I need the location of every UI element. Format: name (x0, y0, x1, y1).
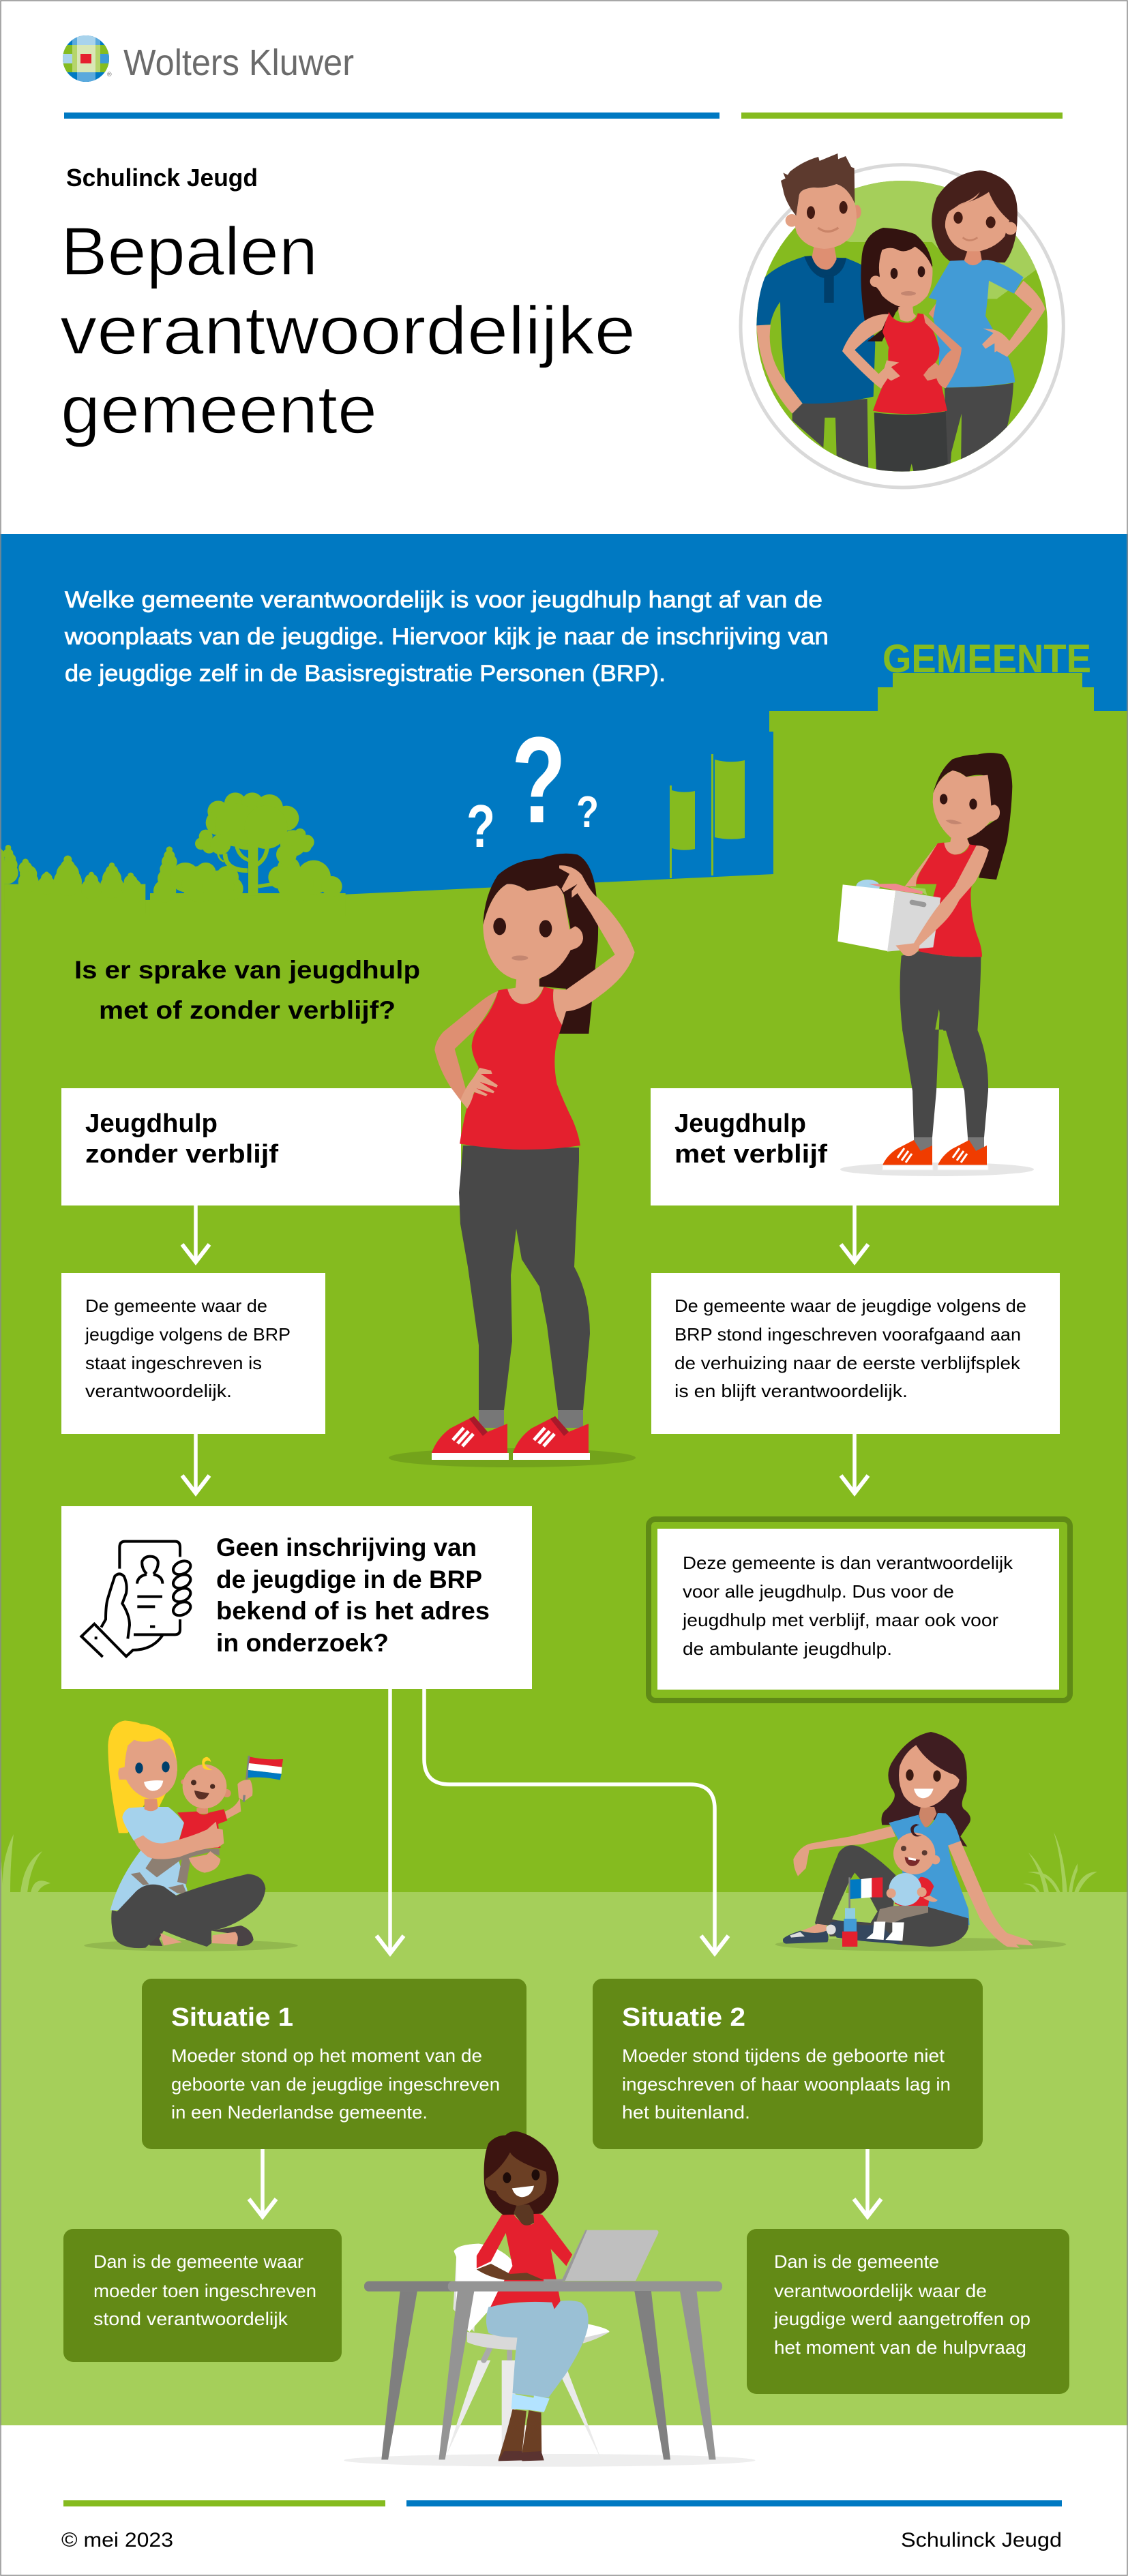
box: situatie 1: geboorte van de jeugdige ingeschreven (171, 2074, 500, 2095)
figure: girl (842, 228, 962, 473)
box: jeugdhulp met verblijf: Jeugdhulp (674, 1109, 806, 1138)
question marks (466, 712, 599, 860)
illustration: family in circle (737, 150, 1069, 488)
title: gemeente (61, 372, 377, 448)
box: deze gemeente: jeugdhulp met verblijf, maar ook voor (682, 1610, 998, 1630)
box: jeugdhulp zonder verblijf: Jeugdhulp (85, 1109, 218, 1138)
box: result situatie 2: Dan is de gemeente (774, 2251, 939, 2272)
illustration: blonde mother with baby and Dutch flag (84, 1720, 298, 1951)
box: gemeente met verblijf: BRP stond ingeschreven voorafgaand aan (674, 1324, 1021, 1345)
question heading: met of zonder verblijf? (99, 996, 396, 1024)
bottom rule blue (406, 2500, 1062, 2506)
box: result situatie 2: verantwoordelijk waar de (774, 2281, 987, 2301)
box: jeugdhulp met verblijf (651, 1088, 1059, 1205)
arrow: text to deze gemeente (841, 1434, 868, 1493)
building sign: GEMEENTE (882, 637, 1091, 681)
box: situatie 1 (142, 1979, 526, 2149)
box: geen inschrijving: in onderzoek? (216, 1629, 389, 1657)
intro text: de jeugdige zelf in de Basisregistratie Personen (BRP). (65, 661, 666, 687)
figure: man (756, 153, 875, 470)
icon: hand holding phone with profile (81, 1542, 193, 1657)
box: jeugdhulp zonder verblijf (61, 1088, 461, 1205)
illustration: woman at desk with laptop (344, 2131, 755, 2467)
box: result situatie 2 (747, 2229, 1069, 2394)
box: result situatie 1: stond verantwoordelijk (93, 2309, 288, 2329)
figure: mother (929, 170, 1045, 473)
box: situatie 1: Moeder stond op het moment van de (171, 2046, 482, 2066)
box: result situatie 1: moeder toen ingeschreven (93, 2281, 316, 2301)
box: result situatie 2: jeugdige werd aangetroffen op (773, 2309, 1030, 2329)
connector: to situatie 2 (424, 1689, 728, 1953)
box: gemeente zonder verblijf: De gemeente waar de (85, 1296, 267, 1316)
question marks: ? (576, 787, 599, 837)
background: light green lawn (0, 1892, 1128, 2425)
box: geen inschrijving: bekend of is het adres (216, 1597, 490, 1625)
top rule green (741, 113, 1063, 119)
arrow: zonder verblijf to text (182, 1205, 209, 1262)
grass tufts (0, 1832, 1097, 1893)
box: gemeente met verblijf (651, 1273, 1060, 1434)
box: deze gemeente: de ambulante jeugdhulp. (683, 1638, 892, 1659)
box: deze gemeente: Deze gemeente is dan verantwoordelijk (683, 1553, 1013, 1573)
question marks: ? (511, 712, 566, 849)
question heading (74, 956, 420, 1024)
logo: Wolters Kluwer (63, 35, 354, 83)
kicker: Schulinck Jeugd (66, 164, 258, 192)
intro text: Welke gemeente verantwoordelijk is voor jeugdhulp hangt af van de (65, 587, 822, 613)
question heading: Is er sprake van jeugdhulp (74, 956, 420, 984)
background: green ground with gemeente building (0, 673, 1128, 1893)
arrow: text to geen inschrijving (182, 1434, 209, 1493)
box: result situatie 2: het moment van de hulpvraag (774, 2337, 1026, 2358)
intro text: woonplaats van de jeugdige. Hiervoor kijk je naar de inschrijving van (64, 624, 829, 650)
top rule blue (64, 113, 719, 119)
box: result situatie 1: Dan is de gemeente waar (93, 2251, 303, 2272)
intro text (64, 587, 829, 687)
bottom rule green (63, 2500, 385, 2506)
box: deze gemeente (649, 1519, 1070, 1701)
question marks: ? (466, 792, 495, 860)
title: Bepalen (61, 213, 318, 290)
box: situatie 2: Situatie 2 (622, 2003, 745, 2032)
box: jeugdhulp zonder verblijf: zonder verblijf (85, 1140, 278, 1169)
box: situatie 2 (593, 1979, 983, 2149)
box: situatie 1: Situatie 1 (171, 2003, 293, 2032)
box: geen inschrijving: Geen inschrijving van (216, 1533, 477, 1561)
illustration: dark haired mother with baby and French flag (775, 1732, 1066, 1951)
box: gemeente met verblijf: de verhuizing naar de eerste verblijfsplek (674, 1353, 1021, 1373)
box: result situatie 1 (63, 2229, 342, 2362)
arrow: situatie 1 to result (249, 2149, 276, 2217)
treeline (0, 792, 346, 916)
box: situatie 1: in een Nederlandse gemeente. (171, 2102, 428, 2123)
illustration: woman carrying box (837, 753, 1034, 1176)
background: blue sky (0, 534, 1128, 916)
box: situatie 2: Moeder stond tijdens de geboorte niet (622, 2046, 945, 2066)
box: situatie 2: het buitenland. (622, 2102, 750, 2123)
box: geen inschrijving: de jeugdige in de BRP (216, 1566, 482, 1593)
title (60, 213, 636, 448)
illustration: central woman scratching head (389, 854, 636, 1467)
title: verantwoordelijke (60, 293, 636, 369)
box: geen inschrijving (61, 1506, 532, 1689)
logo: Wolters Kluwer: ® (107, 71, 112, 78)
logo: Wolters Kluwer: Wolters Kluwer (123, 42, 354, 83)
arrow: situatie 2 to result (854, 2149, 881, 2217)
arrow: met verblijf to text (841, 1205, 868, 1262)
box: gemeente met verblijf: De gemeente waar de jeugdige volgens de (674, 1296, 1026, 1316)
box: gemeente met verblijf: is en blijft verantwoordelijk. (674, 1381, 908, 1401)
box: gemeente zonder verblijf: verantwoordelijk. (85, 1381, 232, 1401)
box: gemeente zonder verblijf: jeugdige volgens de BRP (85, 1324, 291, 1345)
footer brand: Schulinck Jeugd (901, 2529, 1062, 2551)
box: gemeente zonder verblijf (61, 1273, 325, 1434)
flags (670, 754, 745, 878)
box: gemeente zonder verblijf: staat ingeschreven is (85, 1353, 262, 1373)
box: situatie 2: ingeschreven of haar woonplaats lag in (622, 2074, 951, 2095)
box: deze gemeente: voor alle jeugdhulp. Dus voor de (683, 1581, 954, 1602)
box: jeugdhulp met verblijf: met verblijf (674, 1140, 827, 1169)
footer date: © mei 2023 (61, 2529, 173, 2551)
icon: globe (63, 35, 110, 82)
connector: to situatie 1 (376, 1689, 404, 1953)
